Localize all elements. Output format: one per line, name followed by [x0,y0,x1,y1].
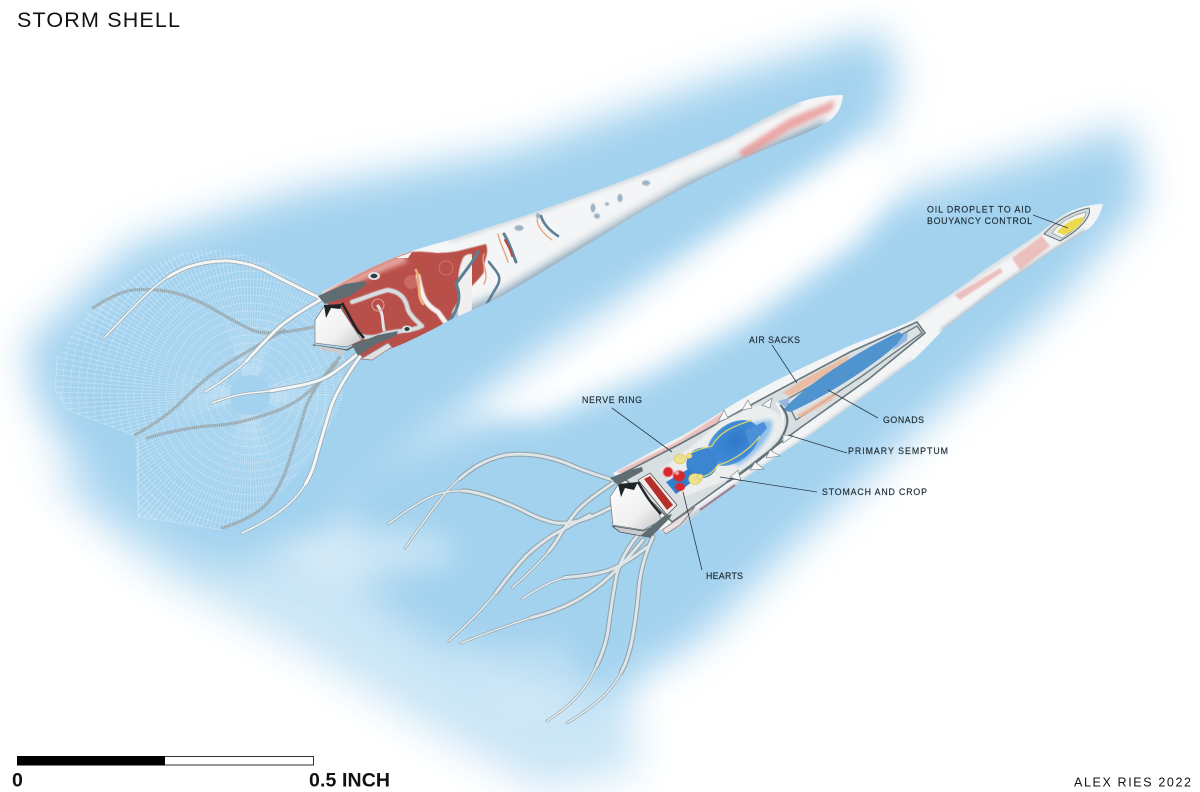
label: nerve ring: NERVE RING [582,395,642,405]
gonads [783,332,905,412]
stomach and crop [666,411,772,494]
dark arm bases [610,467,643,485]
anatomy labels [582,204,1032,581]
label: hearts: HEARTS [706,571,743,581]
purple lower shell markings [700,485,735,510]
label: bouyancy control: BOUYANCY CONTROL [927,216,1032,226]
shell shading [363,128,828,364]
nerve ring ganglia [674,454,703,484]
label: air sacks: AIR SACKS [749,335,800,345]
oil droplet capsule [1044,208,1089,241]
black collar and eye mark [638,482,661,514]
black collar and eye mark [342,303,364,338]
pink tail blush [738,100,835,158]
label: stomach and crop: STOMACH AND CROP [822,487,927,497]
scale label zero: 0 [12,770,23,792]
rear chamber with gonads [786,326,922,420]
title: STORM SHELL [17,8,180,32]
right animal: shell with cutaway [610,204,1103,538]
grey speckles [514,180,650,231]
hearts [663,467,685,491]
wavy white markings [352,216,558,337]
air sacks [782,355,850,418]
dark arm bases [318,281,366,304]
scale bar [12,756,390,792]
scale label half inch: 0.5 INCH [309,770,390,792]
gill band [638,473,677,515]
red mantle pattern [322,244,487,368]
stomach chamber with spines [660,405,784,497]
left lower lobe under the head [361,343,392,360]
lower lobe [662,507,695,534]
label: oil droplet: OIL DROPLET TO AID [927,204,1031,214]
leader lines [612,215,1068,570]
left head shield [315,305,362,347]
credit: ALEX RIES 2022 [1074,776,1191,790]
outer shell [613,204,1103,533]
left animal arms [93,261,370,533]
cutaway wall [620,322,925,522]
left animal: mottled shell [313,95,843,368]
label: gonads: GONADS [883,415,924,425]
pink blush on shell [616,236,1050,474]
right animal arms [388,454,653,723]
right head shield [610,483,662,530]
label: primary semptum: PRIMARY SEMPTUM [848,446,948,456]
webbing mesh between the arms of the left animal [55,250,345,530]
primary septum [727,405,787,482]
